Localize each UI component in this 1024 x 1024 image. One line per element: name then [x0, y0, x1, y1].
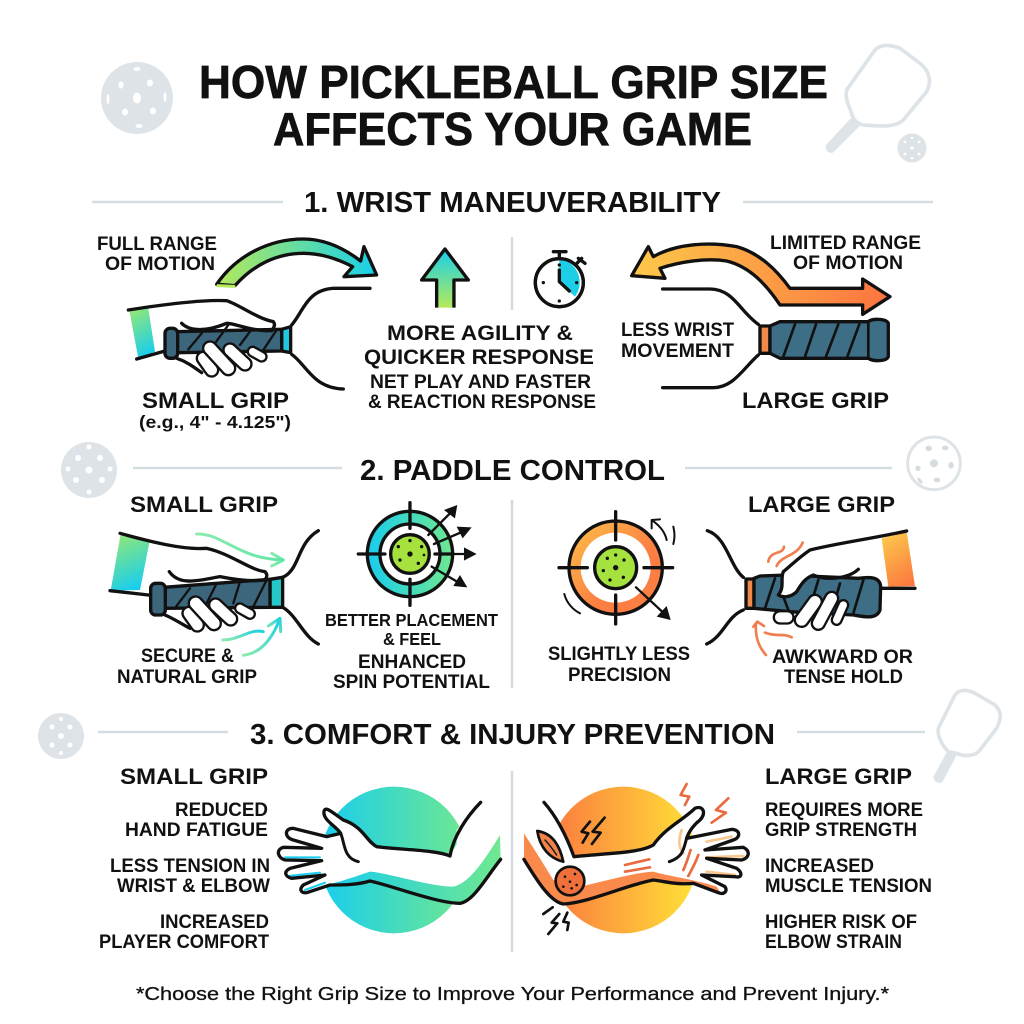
- footer note: *Choose the Right Grip Size to Improve Your Performance and Prevent Injury.*: [136, 983, 889, 1004]
- label: size range: (e.g., 4" - 4.125"): [139, 412, 291, 432]
- illustration: small grip hand: [110, 531, 318, 644]
- icon: tension marks: [753, 543, 803, 655]
- illustration: small grip hand: [128, 288, 370, 389]
- panel: small grip comfort text: REDUCED: [175, 799, 268, 821]
- panel: large grip control: [707, 492, 915, 688]
- label: small grip: SMALL GRIP: [142, 388, 289, 413]
- label: secure natural grip: NATURAL GRIP: [117, 667, 257, 688]
- decoration: pickleball top left: [101, 62, 173, 134]
- decoration: ball section 2 right: [908, 437, 960, 490]
- icon: inflamed ball at elbow: [556, 867, 584, 895]
- icon: up arrow: [422, 249, 468, 308]
- panel: small grip comfort text: HAND FATIGUE: [125, 819, 268, 841]
- label: full range of motion: [97, 233, 217, 275]
- decoration: ball section 3: [38, 713, 84, 759]
- icon: target with drift arrow: [559, 512, 675, 624]
- panel: large grip comfort text: LARGE GRIP: [765, 764, 912, 789]
- label: slightly less precision: SLIGHTLY LESS: [548, 644, 690, 665]
- divider 3: [511, 771, 513, 952]
- illustration: relaxed arm: [278, 787, 503, 933]
- panel: small grip comfort text: SMALL GRIP: [120, 764, 268, 789]
- label: less wrist movement: [621, 319, 734, 362]
- label: secure natural grip: [117, 646, 257, 688]
- label: less wrist movement: LESS WRIST: [621, 319, 734, 341]
- label: limited range of motion: LIMITED RANGE: [770, 232, 921, 254]
- arrow: full range: [217, 239, 377, 286]
- title: HOW PICKLEBALL GRIP SIZE: [199, 56, 828, 108]
- label: large grip: LARGE GRIP: [742, 388, 889, 413]
- decoration: paddle top right: [826, 45, 929, 153]
- panel: small grip control: [110, 492, 318, 688]
- label: large grip: LARGE GRIP: [748, 492, 895, 517]
- icon: stopwatch: [535, 252, 585, 307]
- section heading 2: 2. PADDLE CONTROL: [360, 455, 665, 487]
- label: awkward or tense hold: AWKWARD OR: [772, 647, 913, 668]
- label: limited range of motion: OF MOTION: [793, 252, 903, 274]
- label: awkward or tense hold: TENSE HOLD: [784, 667, 903, 688]
- panel: small grip comfort text: LESS TENSION IN: [110, 855, 270, 877]
- text: agility benefits: NET PLAY AND FASTER: [370, 372, 591, 393]
- title: [199, 56, 828, 155]
- panel: large grip comfort text: REQUIRES MORE: [765, 799, 923, 821]
- icon: black pain marks: [543, 818, 605, 934]
- text: placement and spin: & FEEL: [383, 629, 441, 649]
- text: agility benefits: MORE AGILITY &: [387, 322, 573, 345]
- divider 2: [511, 500, 513, 688]
- label: slightly less precision: PRECISION: [568, 665, 671, 686]
- section heading 3: 3. COMFORT & INJURY PREVENTION: [250, 719, 775, 751]
- illustration: large grip and double arrow: [632, 244, 890, 388]
- decoration: ball section 2 left: [61, 442, 117, 498]
- label: less wrist movement: MOVEMENT: [621, 340, 734, 362]
- panel: large grip comfort text: INCREASED: [765, 855, 874, 877]
- text: agility benefits: QUICKER RESPONSE: [364, 345, 594, 369]
- label: small grip: SMALL GRIP: [130, 492, 278, 517]
- panel: large grip comfort text: GRIP STRENGTH: [765, 819, 917, 841]
- section heading 1: 1. WRIST MANEUVERABILITY: [304, 187, 721, 219]
- panel: small grip comfort text: [99, 764, 271, 953]
- panel: small grip comfort text: INCREASED: [160, 911, 269, 933]
- icon: target with arrows: [358, 503, 477, 605]
- divider 1: [511, 237, 513, 310]
- panel: large grip comfort text: ELBOW STRAIN: [765, 931, 902, 953]
- label: secure natural grip: SECURE &: [141, 646, 234, 667]
- panel: large grip comfort text: MUSCLE TENSION: [765, 875, 932, 897]
- panel: small grip wrist: [97, 233, 377, 432]
- text: placement and spin: BETTER PLACEMENT: [325, 610, 498, 630]
- panel: large grip wrist: [621, 232, 921, 413]
- decoration: paddle section 3: [933, 690, 1000, 783]
- text: placement and spin: ENHANCED: [358, 652, 466, 673]
- decoration: small ball top right: [898, 134, 926, 162]
- illustration: wrist lines: [707, 531, 743, 644]
- illustration: strained arm: [524, 787, 748, 933]
- panel: large grip comfort text: HIGHER RISK OF: [765, 911, 917, 933]
- label: awkward or tense hold: [772, 647, 913, 688]
- icon: orange pain marks: [625, 784, 728, 876]
- label: full range of motion: OF MOTION: [105, 253, 215, 275]
- arrow: grip pressure upper: [197, 534, 283, 566]
- panel: small grip comfort text: WRIST & ELBOW: [117, 875, 271, 897]
- panel: small grip comfort text: PLAYER COMFORT: [99, 931, 269, 953]
- label: full range of motion: FULL RANGE: [97, 233, 217, 255]
- label: limited range of motion: [770, 232, 921, 274]
- title: AFFECTS YOUR GAME: [273, 103, 752, 155]
- illustration: large grip hand: [746, 531, 915, 623]
- text: placement and spin: SPIN POTENTIAL: [333, 672, 490, 693]
- label: slightly less precision: [548, 644, 690, 686]
- panel: large grip comfort text: [765, 764, 932, 953]
- icon: inflamed muscle: [537, 831, 563, 862]
- arrow: grip pressure lower: [223, 618, 281, 655]
- text: agility benefits: [364, 322, 596, 413]
- text: agility benefits: & REACTION RESPONSE: [368, 392, 596, 413]
- text: placement and spin: [325, 610, 498, 693]
